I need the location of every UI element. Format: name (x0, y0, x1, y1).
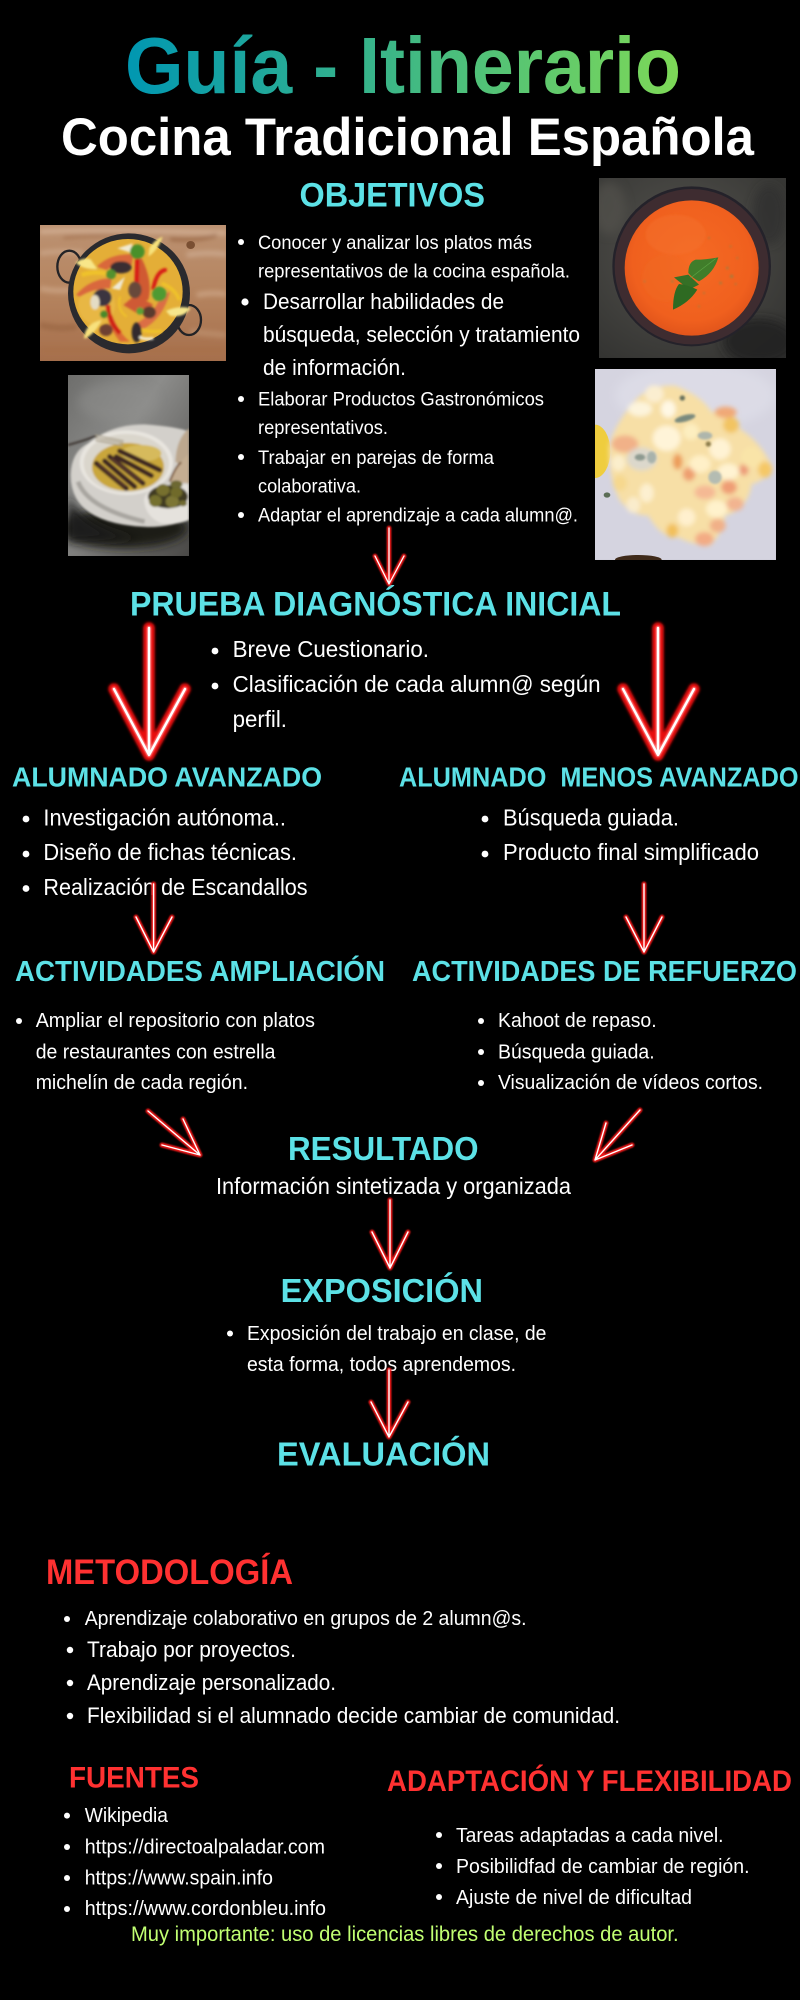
list: exposicion: Exposición del trabajo en clase, de (247, 1322, 546, 1345)
text: resultado: Información sintetizada y organizada (216, 1173, 571, 1199)
list: prueba: perfil. (233, 706, 287, 732)
list: prueba: Clasificación de cada alumn@ según (233, 671, 601, 697)
list: refuerzo: Kahoot de repaso. (498, 1009, 657, 1032)
list: adaptacion: Tareas adaptadas a cada nivel. (456, 1824, 724, 1847)
heading: prueba diagnostica inicial: PRUEBA DIAGNÓSTICA INICIAL (130, 586, 621, 624)
list: ampliacion: michelín de cada región. (36, 1071, 248, 1094)
heading: fuentes: FUENTES (69, 1762, 199, 1794)
list: objetivos: representativos de la cocina española. (258, 262, 570, 282)
image: anchovies (61, 375, 189, 556)
list: ampliacion (16, 1009, 315, 1094)
arrow: diagonal left (148, 1111, 200, 1155)
note: licencias: Muy importante: uso de licencias libres de derechos de autor. (131, 1923, 679, 1946)
arrow: exposicion to evaluacion (371, 1370, 408, 1437)
heading: actividades ampliacion: ACTIVIDADES AMPLIACIÓN (15, 954, 385, 988)
list: objetivos: Conocer y analizar los platos más (258, 233, 532, 254)
list: exposicion (227, 1322, 546, 1376)
list: ampliacion: Ampliar el repositorio con platos (36, 1009, 315, 1032)
list: alumnado avanzado: Investigación autónoma.. (43, 804, 286, 830)
heading: metodologia: METODOLOGÍA (46, 1552, 293, 1592)
heading: objetivos: OBJETIVOS (300, 177, 485, 215)
list: fuentes: https://www.cordonbleu.info (85, 1897, 326, 1920)
heading: exposicion: EXPOSICIÓN (281, 1272, 483, 1310)
list: alumnado menos avanzado: Búsqueda guiada. (503, 804, 679, 830)
image: ensaladilla (595, 369, 776, 560)
image: gazpacho (599, 178, 786, 358)
list: adaptacion: Posibilidfad de cambiar de región. (456, 1855, 750, 1878)
arrow: menos avanzado to refuerzo (626, 884, 662, 952)
list: objetivos: colaborativa. (258, 476, 361, 498)
list: alumnado avanzado: Realización de Escandallos (43, 874, 308, 900)
subtitle: Cocina Tradicional Española (61, 108, 754, 167)
list: fuentes (64, 1804, 326, 1920)
list: alumnado avanzado (23, 804, 308, 900)
list: prueba (212, 636, 601, 732)
list: metodologia: Aprendizaje personalizado. (87, 1670, 336, 1695)
list: metodologia: Aprendizaje colaborativo en grupos de 2 alumn@s. (85, 1607, 526, 1630)
heading: evaluacion: EVALUACIÓN (277, 1436, 490, 1474)
title: Guía - Itinerario (125, 21, 681, 110)
arrow: objetivos to prueba (375, 528, 404, 584)
list: objetivos: búsqueda, selección y tratamiento (263, 322, 580, 347)
arrow: big left (114, 628, 185, 755)
list: fuentes: https://www.spain.info (85, 1866, 273, 1889)
list: objetivos: Adaptar el aprendizaje a cada alumn@. (258, 506, 578, 527)
list: objetivos: Elaborar Productos Gastronómicos (258, 390, 544, 411)
list: objetivos: Trabajar en parejas de forma (258, 448, 494, 469)
list: alumnado menos avanzado: Producto final simplificado (503, 839, 759, 865)
arrow: resultado to exposicion (372, 1200, 408, 1268)
list: metodologia: Flexibilidad si el alumnado decide cambiar de comunidad. (87, 1703, 620, 1728)
list: refuerzo: Búsqueda guiada. (498, 1040, 655, 1064)
list: prueba: Breve Cuestionario. (233, 636, 429, 662)
heading: alumnado avanzado: ALUMNADO AVANZADO (12, 762, 322, 793)
list: alumnado menos avanzado (482, 804, 759, 865)
list: refuerzo: Visualización de vídeos cortos. (498, 1071, 763, 1094)
list: fuentes: Wikipedia (85, 1804, 169, 1827)
list: metodologia: Trabajo por proyectos. (87, 1637, 296, 1662)
list: objetivos: Desarrollar habilidades de (263, 289, 504, 314)
arrow: avanzado to ampliacion (136, 884, 172, 952)
arrow: diagonal right (595, 1110, 640, 1160)
list: alumnado avanzado: Diseño de fichas técnicas. (43, 839, 297, 865)
list: objetivos: de información. (263, 355, 406, 380)
list: adaptacion (436, 1824, 750, 1909)
list: adaptacion: Ajuste de nivel de dificultad (456, 1886, 692, 1909)
list: exposicion: esta forma, todos aprendemos. (247, 1353, 516, 1376)
heading: resultado: RESULTADO (288, 1131, 479, 1168)
image: paella (40, 225, 226, 361)
arrow: big right (623, 628, 694, 755)
list: fuentes: https://directoalpaladar.com (85, 1836, 325, 1859)
list: objetivos: representativos. (258, 418, 388, 439)
list: objetivos (238, 233, 580, 527)
list: ampliacion: de restaurantes con estrella (36, 1040, 276, 1064)
list: refuerzo (478, 1009, 763, 1094)
list: metodologia (64, 1607, 620, 1728)
